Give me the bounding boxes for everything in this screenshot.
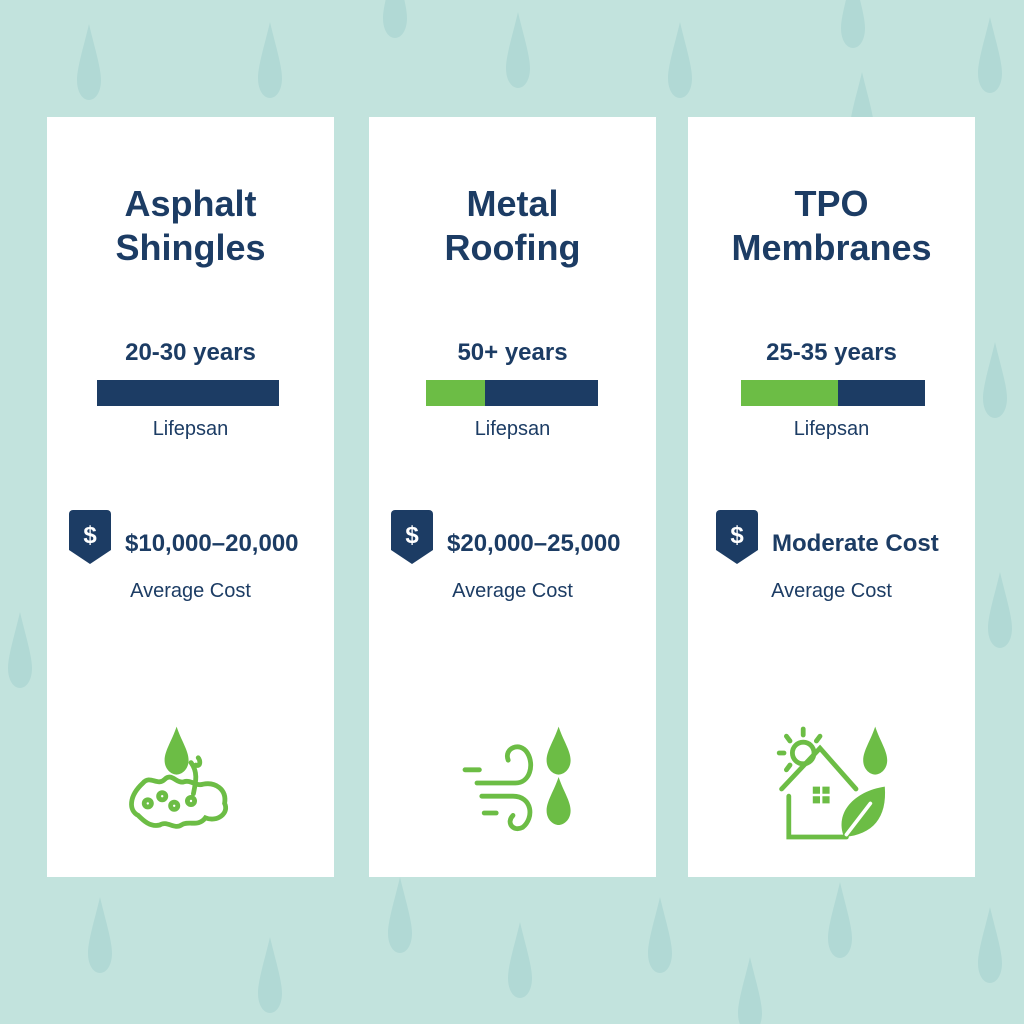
cost label: Average Cost xyxy=(452,580,573,602)
lifespan bar xyxy=(97,380,279,406)
cost label: Average Cost xyxy=(130,580,251,602)
panel: metal roofing xyxy=(369,117,656,877)
cost: $ xyxy=(83,522,97,549)
lifespan value: 50+ years xyxy=(457,339,568,366)
lifespan value: 20-30 years xyxy=(125,339,256,366)
lifespan bar xyxy=(426,380,598,406)
icon: water on moss xyxy=(129,726,228,829)
title: Roofing xyxy=(445,227,580,268)
cost xyxy=(716,510,939,564)
title: TPO xyxy=(794,183,868,224)
title: Shingles xyxy=(115,227,266,268)
lifespan label: Lifepsan xyxy=(475,418,550,440)
cost: $ xyxy=(730,522,744,549)
panel: asphalt shingles xyxy=(47,117,334,877)
icon: eco house xyxy=(776,726,888,840)
title: Metal xyxy=(466,183,559,224)
cost: $ xyxy=(405,522,419,549)
cost xyxy=(391,510,621,564)
cost xyxy=(69,510,299,564)
title xyxy=(731,183,932,268)
lifespan value: 25-35 years xyxy=(766,339,897,366)
title xyxy=(445,183,580,268)
lifespan bar xyxy=(741,380,925,406)
cost: $10,000–20,000 xyxy=(125,530,299,557)
cost: Moderate Cost xyxy=(772,530,939,557)
panel: TPO membranes xyxy=(688,117,975,877)
title: Asphalt xyxy=(124,183,256,224)
icon: wind and rain xyxy=(462,726,571,832)
lifespan label: Lifepsan xyxy=(153,418,228,440)
title xyxy=(115,183,266,268)
lifespan label: Lifepsan xyxy=(794,418,869,440)
title: Membranes xyxy=(731,227,932,268)
cost: $20,000–25,000 xyxy=(447,530,621,557)
cost label: Average Cost xyxy=(771,580,892,602)
